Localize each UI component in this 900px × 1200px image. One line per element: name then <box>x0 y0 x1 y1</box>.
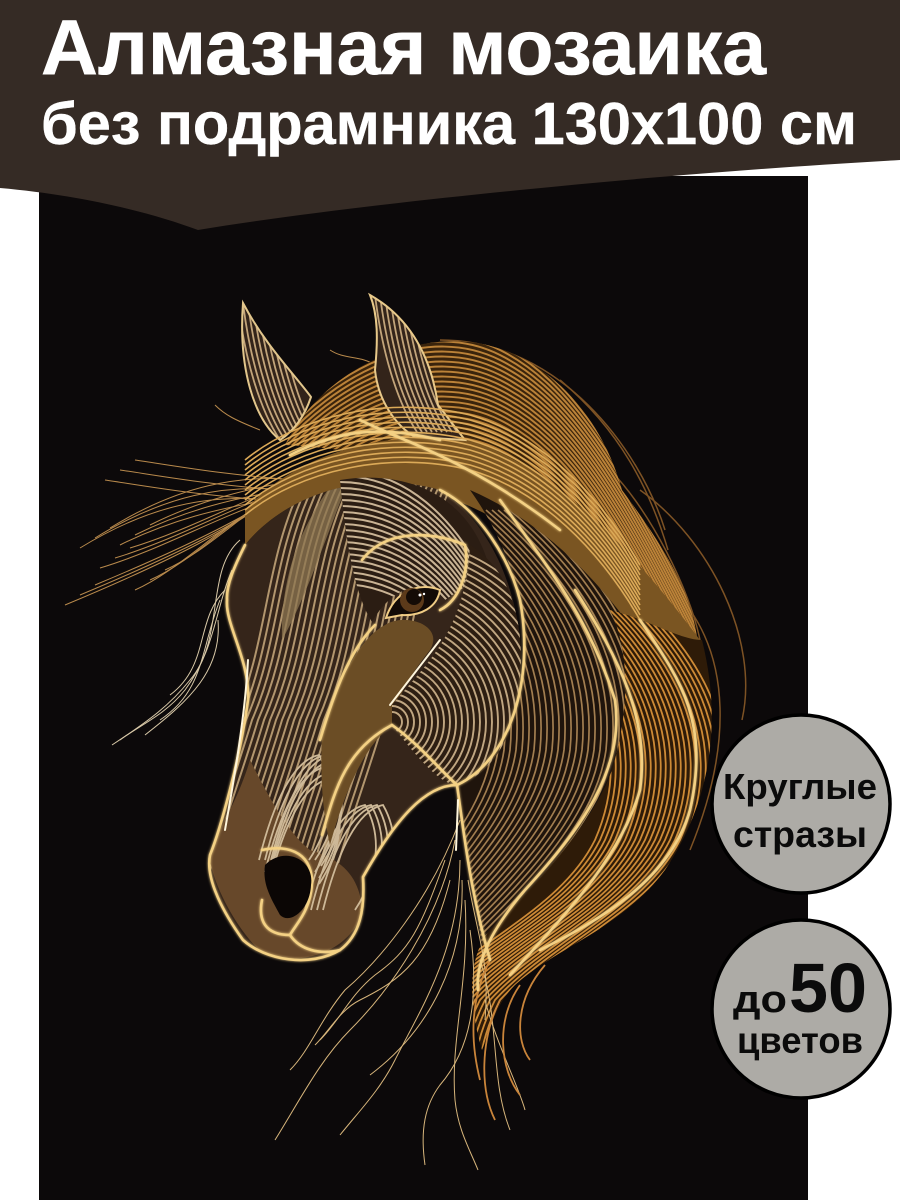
badge: up to 50 colours: 50 <box>789 949 867 1027</box>
forehead pattern <box>282 480 345 640</box>
white highlights <box>225 640 458 850</box>
upper mane <box>286 341 697 636</box>
badge: up to 50 colours: цветов <box>737 1020 863 1061</box>
picture: black canvas with golden horse <box>39 176 808 1200</box>
badge: round rhinestones: Круглые <box>723 766 877 807</box>
head fill <box>210 484 515 959</box>
muzzle stripes <box>259 755 394 910</box>
mane lower wisps <box>473 960 545 1120</box>
artwork: horse head <box>65 290 746 1170</box>
neck <box>458 490 626 942</box>
badge: round rhinestones <box>712 715 890 893</box>
right ear <box>365 290 470 445</box>
subtitle: без подрамника 130х100 см <box>41 91 857 157</box>
left flowing hair <box>65 350 375 745</box>
nostril <box>264 856 311 918</box>
lower strands <box>275 820 525 1170</box>
banner: header band <box>0 0 900 230</box>
badge: up to 50 colours <box>712 920 890 1098</box>
bright contour lines <box>209 420 696 990</box>
center face warm <box>321 620 433 845</box>
badge: round rhinestones: стразы <box>733 814 867 855</box>
lower mane <box>472 610 712 1050</box>
brow contours <box>340 478 486 622</box>
cheek concentric lines <box>392 550 521 784</box>
left ear <box>241 300 312 442</box>
title: Алмазная мозаика <box>41 3 767 91</box>
forelock and mane band <box>245 407 640 620</box>
right wispy outer hair <box>440 340 746 850</box>
muzzle warm tone <box>210 760 362 959</box>
badge: up to 50 colours: до <box>733 979 787 1021</box>
eye <box>386 587 440 618</box>
mane underlayer <box>245 438 700 650</box>
